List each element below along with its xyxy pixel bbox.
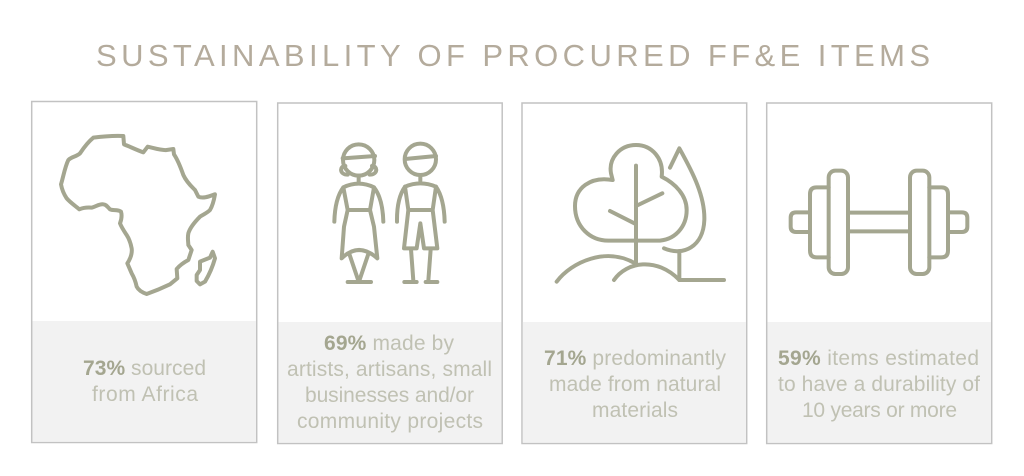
statistic text: 69% (287, 332, 492, 433)
statistic text: 59% (778, 347, 980, 422)
statistic text: 73%: 73% sourced (83, 357, 206, 380)
icon: woman and man figures (334, 144, 445, 282)
statistic text: 71%: materials (592, 399, 678, 422)
panel: sourced from Africa (32, 102, 257, 442)
statistic text: 69%: 69% made by (324, 332, 454, 355)
statistic text: 69%: businesses and/or (305, 384, 474, 407)
panel: natural materials (522, 103, 747, 444)
statistic text: 71%: made from natural (549, 373, 721, 396)
statistic text: 69%: artists, artisans, small (287, 358, 492, 381)
icon: trees on hills (557, 145, 724, 282)
title: SUSTAINABILITY OF PROCURED FF&E ITEMS (96, 38, 930, 73)
statistic text: 73%: from Africa (92, 383, 198, 406)
icon: woman (334, 144, 383, 282)
icon: man (397, 144, 445, 282)
statistic text: 69%: community projects (297, 410, 483, 433)
statistic text: 73% (83, 357, 206, 406)
icon: dumbbell (791, 171, 967, 274)
panel: made by artists and artisans (278, 103, 502, 444)
statistic text: 59%: to have a durability of (778, 373, 980, 396)
statistic text: 71% (544, 347, 726, 422)
statistic text: 71%: 71% predominantly (544, 347, 726, 370)
statistic text: 59%: 10 years or more (802, 399, 957, 422)
icon: map of Africa (61, 136, 215, 294)
panel: durability (767, 103, 992, 444)
statistic text: 59%: 59% items estimated (778, 347, 979, 370)
